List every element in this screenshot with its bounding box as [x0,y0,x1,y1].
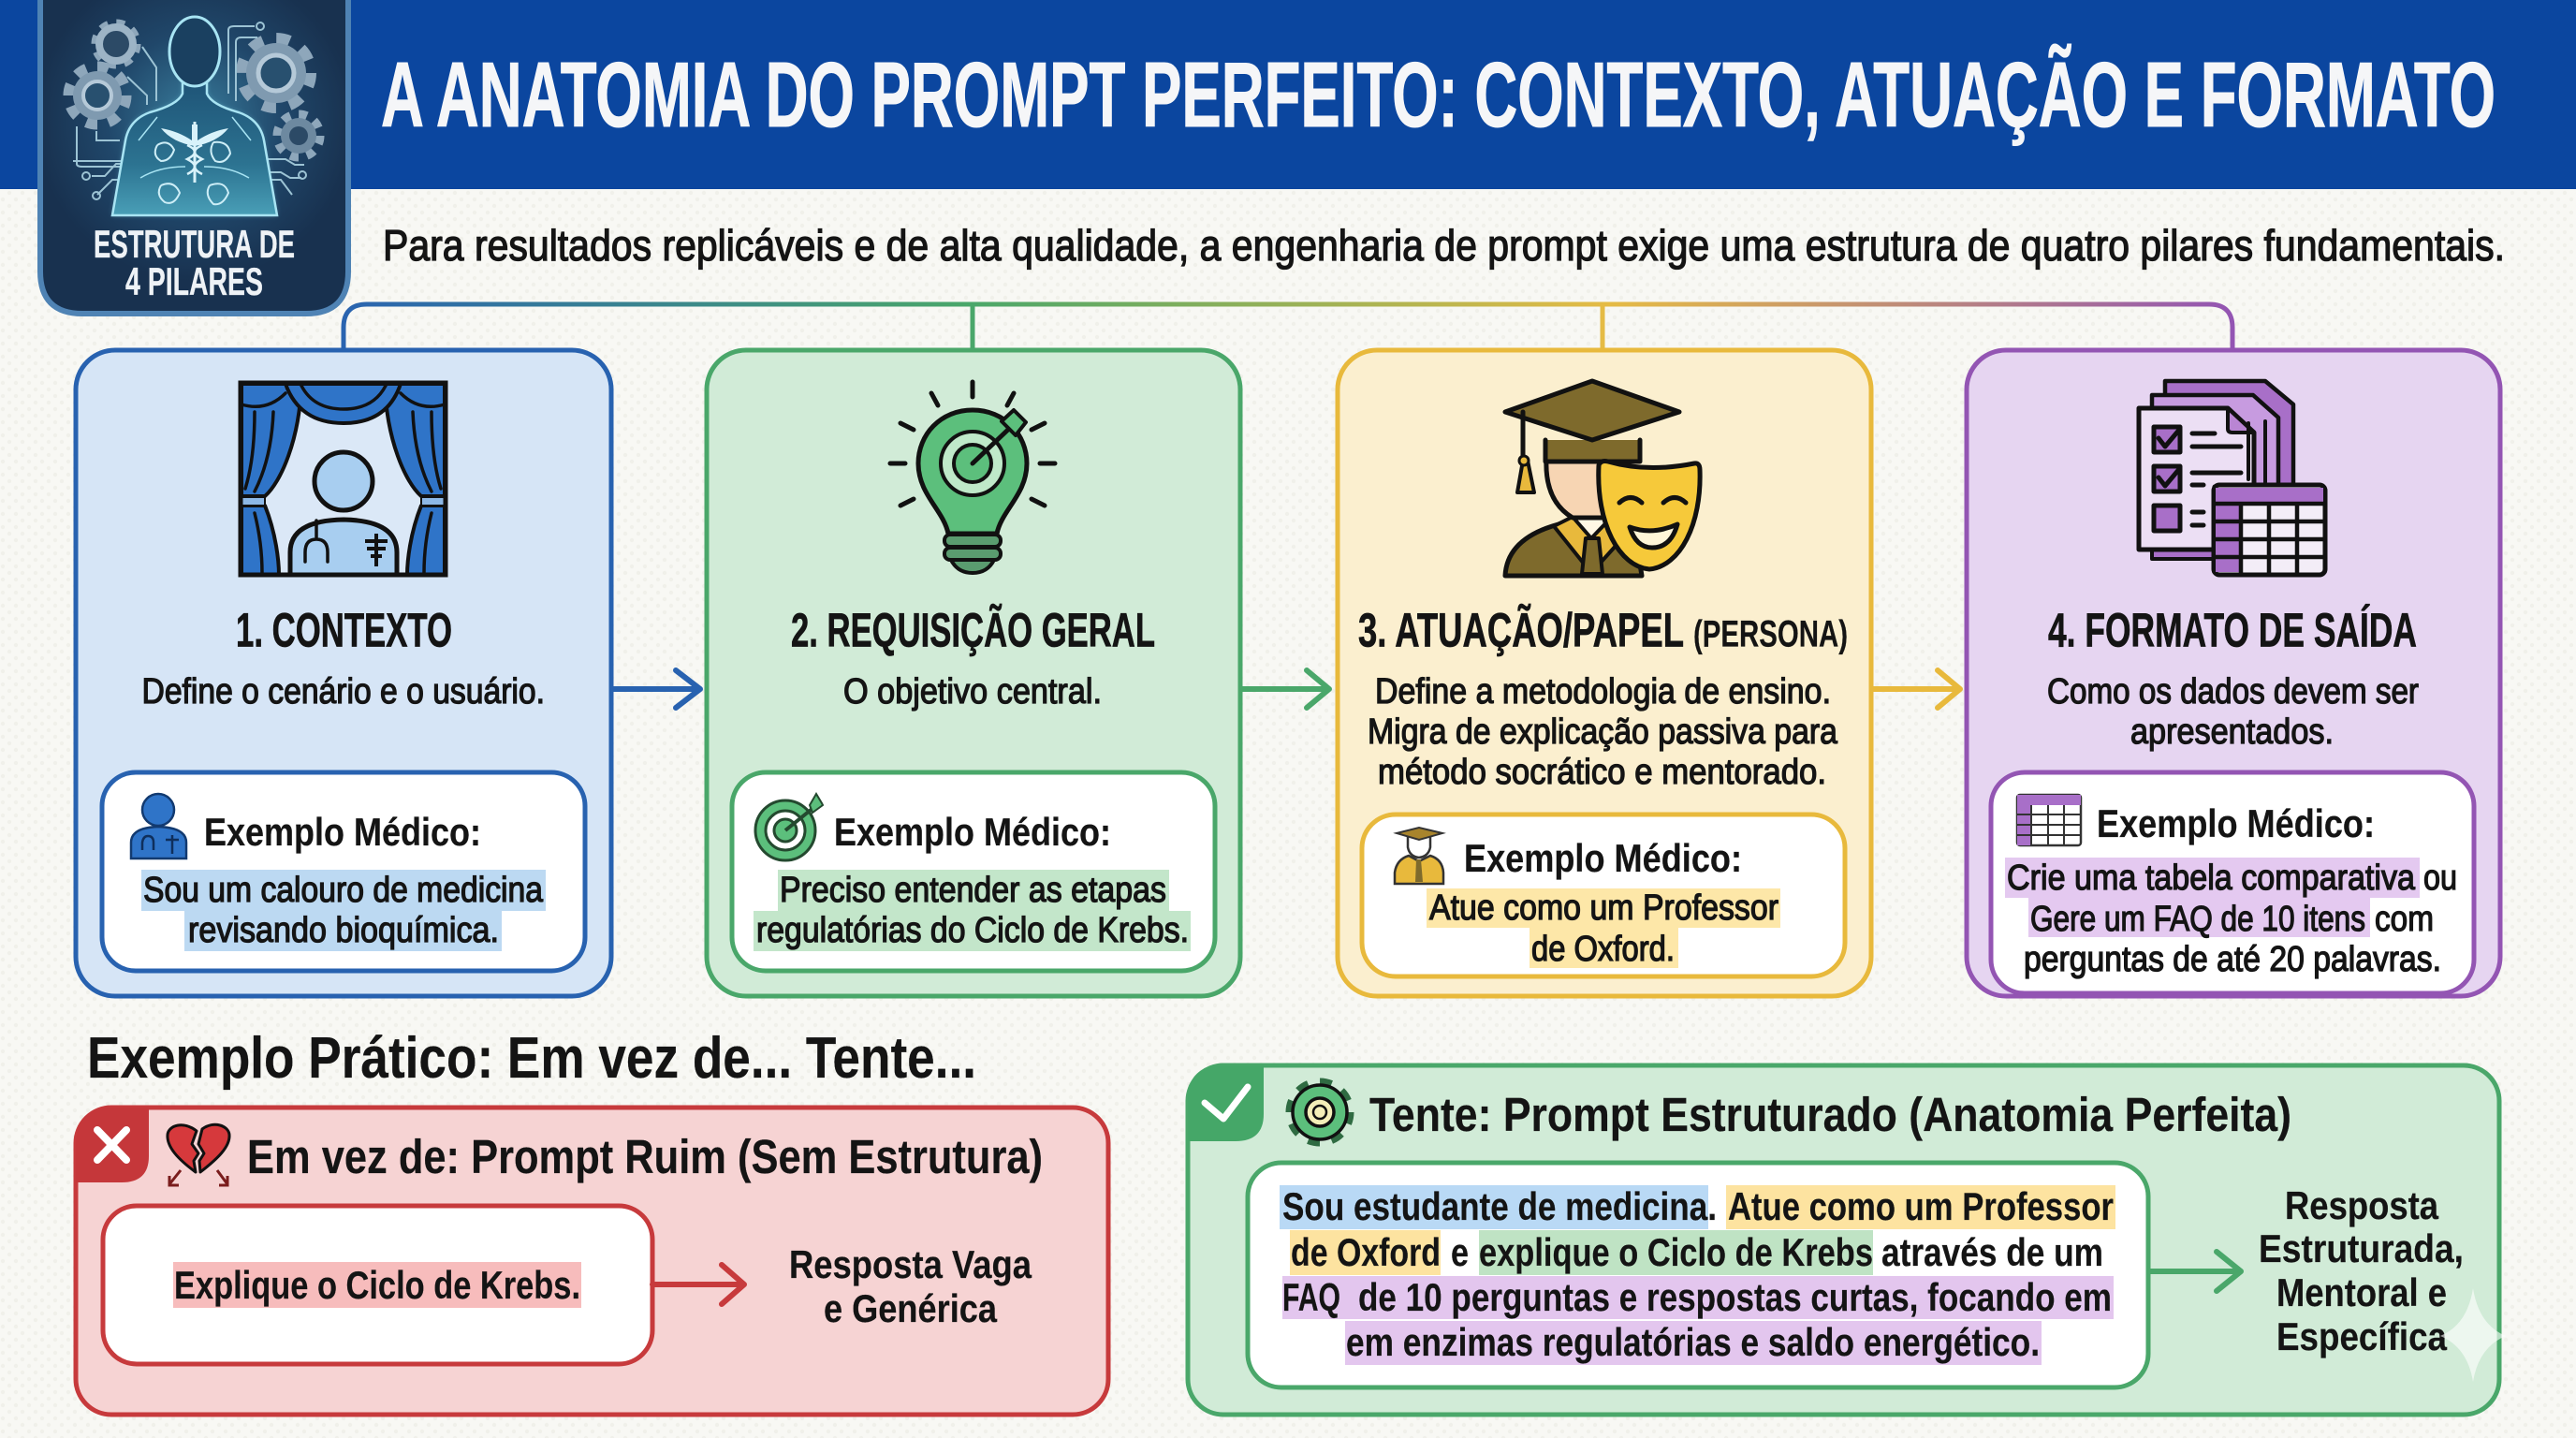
example box [102,772,585,971]
icon: documents and table [2139,381,2325,575]
result text: Específica [2276,1314,2448,1358]
arrow: requisicao to atuacao [1241,670,1329,708]
icon: sparkle [2440,1288,2506,1382]
badge label: 4 PILARES [125,259,263,303]
arrow: contexto to requisicao [612,670,700,708]
panel: prompt estruturado [1188,1065,2499,1415]
example box: de Oxford. [1531,930,1675,969]
header band [0,0,2576,189]
example box: regulatórias do Ciclo de Krebs. [756,911,1189,950]
arrow: atuacao to formato [1872,670,1960,708]
icon: curtain stage with doctor [241,383,446,575]
result text: Mentoral e [2276,1270,2447,1314]
heading: 2. REQUISIÇÃO GERAL [791,603,1155,657]
example box: Exemplo Médico: [834,810,1111,854]
prompt box [1248,1163,2148,1387]
icon: doctor [131,794,186,858]
description: método socrático e mentorado. [1378,753,1826,792]
description: Define a metodologia de ensino. [1375,672,1831,712]
example box: Preciso entender as etapas [780,871,1166,910]
prompt box: Atue como um Professor [1728,1184,2114,1228]
heading: (PERSONA) [1693,614,1848,655]
panel: 2 requisicao geral [707,350,1240,996]
arrow [2149,1252,2241,1291]
example box: Exemplo Médico: [204,810,481,854]
description: Define o cenário e o usuário. [142,672,545,712]
example box: Exemplo Médico: [1464,836,1742,880]
prompt box: através de um [1881,1230,2103,1274]
panel: 3 atuacao papel [1338,350,1871,996]
example box [1362,814,1845,976]
circuit lines [73,22,306,199]
connector bracket [344,304,2232,349]
figure [112,17,277,215]
badge: estrutura de 4 pilares [40,0,348,314]
description: Migra de explicação passiva para [1368,712,1838,752]
example box [732,772,1215,971]
icon: small table [2017,795,2081,845]
prompt box: Sou estudante de medicina. [1282,1184,1717,1228]
heading: Em vez de: Prompt Ruim (Sem Estrutura) [247,1130,1043,1183]
result text: Resposta Vaga [789,1242,1032,1286]
example box: Exemplo Médico: [2097,801,2375,845]
prompt box: de 10 perguntas e respostas curtas, focando em [1358,1275,2112,1319]
icon: broken heart [168,1124,229,1185]
arrow [652,1265,744,1304]
example box: Sou um calouro de medicina [143,871,544,910]
section heading: Exemplo Prático: Em vez de... Tente... [87,1026,976,1091]
heading: Tente: Prompt Estruturado (Anatomia Perfeita) [1369,1088,2291,1141]
icon: target [755,794,823,860]
description: O objetivo central. [843,672,1102,712]
prompt box [103,1206,652,1364]
description: apresentados. [2130,712,2334,752]
result text [789,1242,1032,1330]
icon: gear [1290,1082,1350,1142]
icon: X tab [76,1108,149,1182]
heading: 4. FORMATO DE SAÍDA [2048,603,2417,657]
icon: check tab [1188,1065,1264,1141]
icon: graduate with mask [1505,381,1700,576]
icon: lightbulb target [890,382,1055,573]
description: Como os dados devem ser [2047,672,2419,712]
panel: 4 formato de saida [1967,350,2500,996]
example box: Gere um FAQ de 10 itens [2030,900,2365,939]
example box: ou [2423,858,2457,898]
prompt box: em enzimas regulatórias e saldo energético. [1346,1320,2040,1364]
prompt box: FAQ [1282,1275,1340,1319]
example box: perguntas de até 20 palavras. [2024,940,2441,979]
prompt box: Explique o Ciclo de Krebs. [174,1263,580,1307]
heading: 3. ATUAÇÃO/PAPEL [1358,603,1684,657]
panel: prompt ruim [76,1108,1108,1415]
example box: com [2375,900,2434,939]
result text: e Genérica [824,1286,998,1330]
heading: 1. CONTEXTO [236,603,452,657]
description [1368,672,1838,792]
prompt box: e [1451,1230,1469,1274]
badge label [94,222,295,303]
panel: 1 contexto [76,350,611,996]
icon: small graduate [1395,828,1443,884]
prompt box: explique o Ciclo de Krebs [1479,1230,1873,1274]
result text: Resposta [2285,1183,2439,1227]
example box: revisando bioquímica. [188,911,499,950]
badge label: ESTRUTURA DE [94,222,295,266]
result text: Estruturada, [2259,1226,2464,1270]
prompt box: de Oxford [1291,1230,1441,1274]
example box: Atue como um Professor [1429,888,1778,928]
result text [2259,1183,2464,1358]
description [2047,672,2419,752]
example box: Crie uma tabela comparativa [2007,858,2416,898]
example box [1991,772,2474,993]
icon: gears [68,23,320,157]
